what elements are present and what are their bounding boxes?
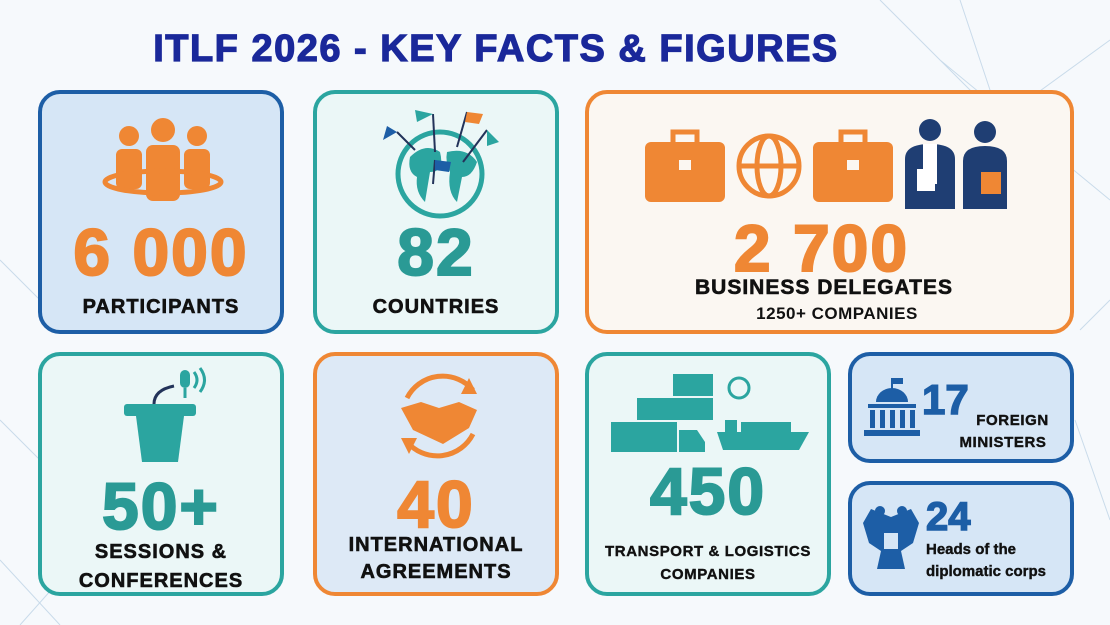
number: 17: [922, 376, 969, 423]
icon: briefcases globe people: [645, 119, 1007, 209]
label: AGREEMENTS: [360, 561, 512, 583]
label: COUNTRIES: [373, 296, 499, 318]
label: [926, 541, 1046, 580]
label: [959, 412, 1049, 451]
label: COMPANIES: [660, 566, 756, 583]
number: 82: [397, 215, 475, 289]
label: FOREIGN: [976, 412, 1049, 429]
number: 6 000: [73, 215, 249, 289]
label: MINISTERS: [959, 434, 1047, 451]
sublabel: 1250+ COMPANIES: [756, 304, 918, 323]
icon: podium microphone: [124, 367, 206, 462]
label: TRANSPORT & LOGISTICS: [605, 543, 811, 560]
label: BUSINESS DELEGATES: [695, 276, 953, 299]
label: [79, 541, 243, 592]
icon: globe with flags: [383, 110, 499, 218]
label: SESSIONS &: [95, 541, 227, 563]
panel: transport: [585, 352, 831, 596]
number: 40: [397, 467, 475, 541]
panel: business delegates: [585, 90, 1074, 334]
label: CONFERENCES: [79, 570, 243, 592]
number: 2 700: [734, 211, 909, 285]
panel: diplomatic corps: [848, 481, 1074, 596]
icon: people: [102, 118, 224, 201]
icon: handshake: [401, 374, 477, 458]
title: ITLF 2026 - KEY FACTS & FIGURES: [153, 28, 839, 70]
panel: countries: [313, 90, 559, 334]
panel: sessions: [38, 352, 284, 596]
icon: government building: [864, 378, 920, 436]
number: 50+: [102, 469, 220, 543]
label: PARTICIPANTS: [83, 296, 239, 318]
icon: double-headed eagle: [863, 506, 919, 569]
number: 24: [926, 495, 970, 539]
label: Heads of the: [926, 541, 1016, 558]
label: diplomatic corps: [926, 563, 1046, 580]
number: 450: [650, 454, 766, 528]
label: INTERNATIONAL: [349, 534, 523, 556]
icon: truck ship containers: [611, 374, 809, 452]
label: [604, 543, 811, 583]
label: [349, 534, 523, 583]
panel: participants: [38, 90, 284, 334]
panel: agreements: [313, 352, 559, 596]
panel: foreign ministers: [848, 352, 1074, 463]
